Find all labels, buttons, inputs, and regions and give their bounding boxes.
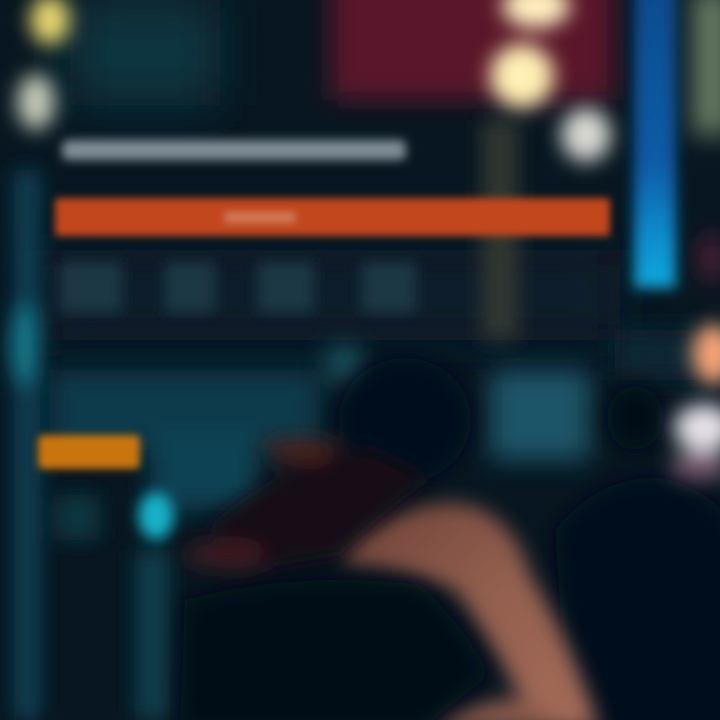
street lights [17,0,720,384]
woman's hair [183,358,471,575]
faint columns of text [60,262,416,312]
teal shop band [50,348,590,510]
woman [180,358,600,720]
amber button [38,435,140,469]
grey pillar [482,120,518,340]
cyan glow [138,492,174,540]
orange banner [55,198,610,236]
upper dark wall [40,0,620,340]
maroon sign [330,0,615,100]
left teal column [10,170,170,720]
man silhouette [555,386,720,720]
woman's dark top [180,580,490,720]
right wall [615,0,720,380]
bright shop light [670,404,720,480]
woman's shoulder and arm [345,503,600,720]
heading [62,140,406,160]
blue neon bar [634,0,676,288]
